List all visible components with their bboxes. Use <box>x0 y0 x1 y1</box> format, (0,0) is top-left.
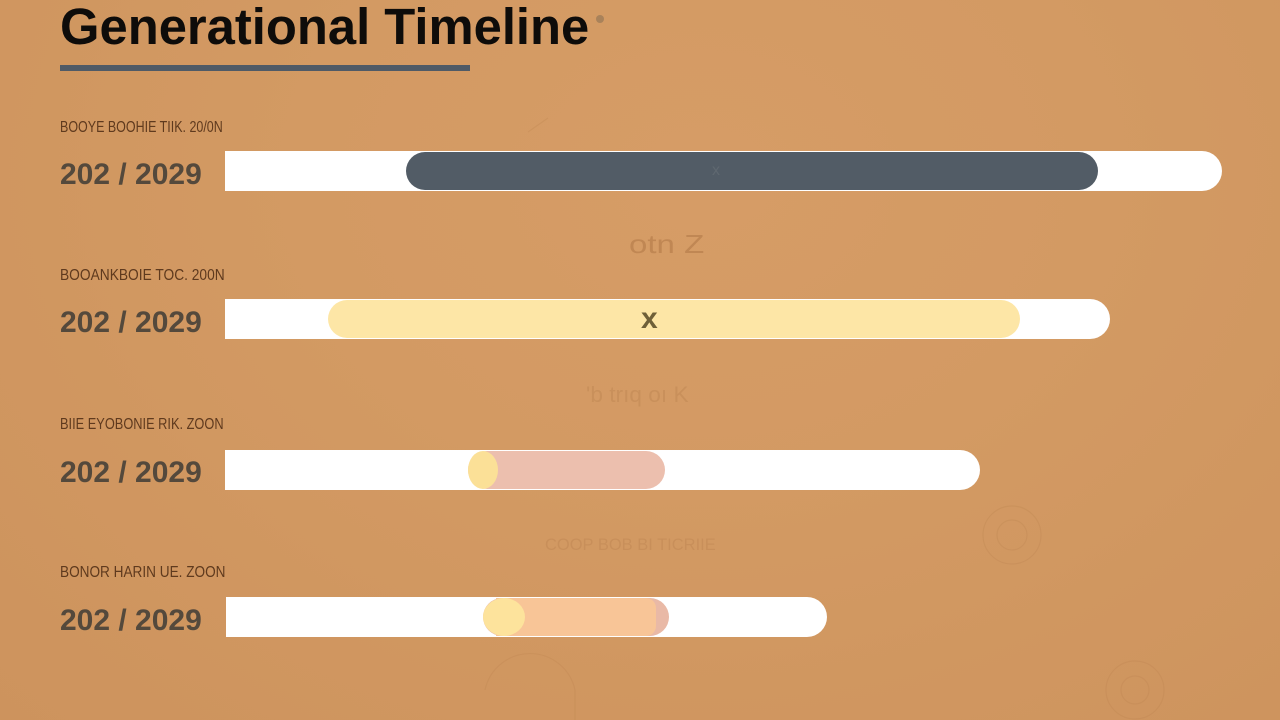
row 4 years: 202 / 2029 <box>60 604 202 637</box>
row 4 pink segment <box>483 598 669 636</box>
row 3 label: BIIE EYOBONIE RIK. ZOON <box>60 416 224 433</box>
row 2 yellow segment <box>328 300 1020 338</box>
title underline <box>60 65 470 71</box>
row 3 years: 202 / 2029 <box>60 456 202 489</box>
row 4 yellow cap <box>483 598 525 636</box>
row 2 label: BOOANKBOIE TOC. 200N <box>60 267 225 284</box>
ghost caption 2: 'b trıq oı K <box>586 382 689 407</box>
ghost caption 3: COOP BOB BI TICRIIE <box>545 535 716 554</box>
row 2 bar <box>225 299 1110 339</box>
row 1 bar <box>225 151 1222 191</box>
title dot <box>596 15 604 23</box>
ghost caption 1: otn Z <box>629 229 704 259</box>
row 4 bar <box>226 597 827 637</box>
row 4 label: BONOR HARIN UE. ZOON <box>60 564 225 581</box>
row 4 peach segment <box>496 598 656 636</box>
row 3 pink segment <box>468 451 665 489</box>
row 1 label: BOOYE BOOHIE TIIK. 20/0N <box>60 119 223 136</box>
row 3 bar <box>225 450 980 490</box>
row 1 dark segment <box>406 152 1098 190</box>
row 1 years: 202 / 2029 <box>60 158 202 191</box>
row 2 segment mark: x <box>641 302 658 335</box>
row 3 yellow cap <box>468 451 498 489</box>
row 2 years: 202 / 2029 <box>60 306 202 339</box>
row 1 segment mark: x <box>712 162 720 179</box>
